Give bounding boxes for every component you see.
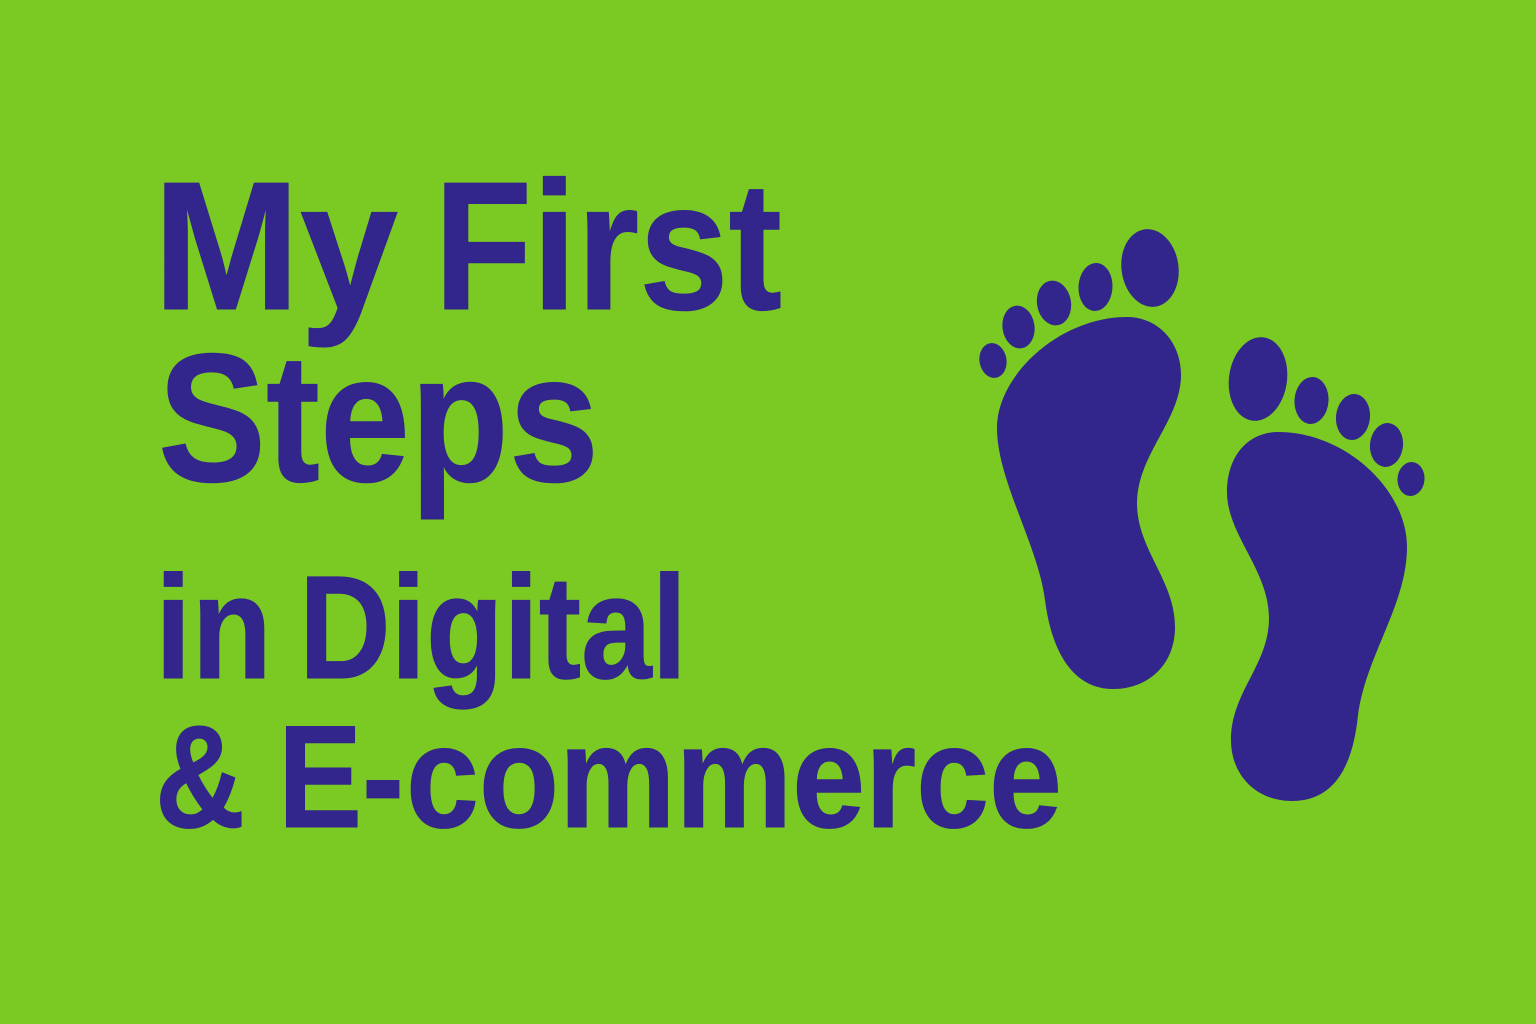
title line: My First xyxy=(153,143,782,348)
right foot toe 4 xyxy=(1368,421,1405,469)
right foot big toe xyxy=(1223,333,1293,425)
title line: My First: My xyxy=(153,143,398,348)
subtitle line: in Digital xyxy=(155,546,687,710)
right foot xyxy=(1223,333,1426,801)
title line: Steps: Steps xyxy=(158,315,599,520)
left foot toe 2 xyxy=(1077,262,1114,312)
right foot toe 2 xyxy=(1293,376,1330,425)
left foot xyxy=(977,225,1184,689)
left foot little toe xyxy=(977,341,1009,380)
subtitle line: & E-commerce: E- xyxy=(278,695,404,858)
left foot sole xyxy=(997,317,1181,689)
subtitle xyxy=(155,546,1062,858)
title xyxy=(153,143,782,520)
left foot toe 4 xyxy=(1000,303,1037,351)
subtitle line: in Digital: Digital xyxy=(299,546,687,710)
subtitle line: & E-commerce xyxy=(155,695,1062,858)
right foot little toe xyxy=(1396,461,1426,497)
right foot toe 3 xyxy=(1334,392,1372,442)
left foot toe 3 xyxy=(1033,278,1075,328)
subtitle line: & E-commerce: commerce xyxy=(406,695,1062,858)
left foot big toe xyxy=(1116,225,1184,311)
subtitle line: in Digital: in xyxy=(155,546,272,710)
right foot sole xyxy=(1227,432,1407,801)
subtitle line: & E-commerce: & xyxy=(155,695,245,858)
icon: footprints xyxy=(977,225,1426,801)
title line: My First: First xyxy=(434,143,782,348)
